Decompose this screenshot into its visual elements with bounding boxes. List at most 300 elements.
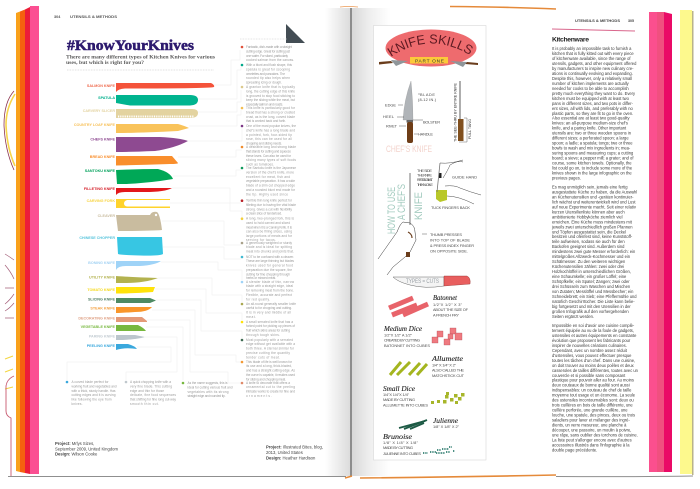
tomato knife: TOMATO KNIFE bbox=[87, 288, 116, 292]
text block: german: Schneidebrett; ein Sieb; eine Pfeffermühle und bbox=[552, 294, 637, 299]
cut: brunoise bbox=[383, 432, 455, 456]
text block: german: erreichen. Eine Küche muss mindestens mit bbox=[552, 219, 633, 224]
steak knife bbox=[90, 306, 152, 313]
text block: french: dients, un verre mesureur, une planche à bbox=[552, 422, 627, 428]
note: cleaver bbox=[241, 241, 294, 254]
cut: brunoise: JULIENNE INTO CUBES bbox=[383, 451, 421, 456]
note: country loaf: that is worked back and forth. bbox=[246, 119, 286, 123]
subtitle: There are many different types of Kitchen Knives for various bbox=[66, 56, 215, 60]
text block: french: évolution que proposent les fabricants pour bbox=[552, 338, 631, 343]
text block: german: Es mag unmöglich sein, jemals eine fertig bbox=[552, 184, 628, 190]
note: fork: large portions of meats and for bbox=[246, 234, 293, 238]
note: fork bbox=[241, 216, 294, 242]
credit right: Project: Illustrated Bites, blog, bbox=[266, 444, 323, 450]
note: santoku: The Santoku knife is the Japanese bbox=[246, 166, 296, 170]
credit left: September 2009, United Kingdom bbox=[55, 446, 118, 452]
text block: german: an Küchenutensilien und -geräten kontinuier- bbox=[552, 194, 634, 200]
peeling knife bbox=[87, 344, 137, 350]
thumb note bbox=[422, 232, 474, 254]
note: steak bbox=[241, 360, 295, 381]
triangle page corner bbox=[286, 24, 305, 43]
note: slicer bbox=[241, 85, 295, 107]
page header left: 304 bbox=[54, 15, 61, 19]
note: chefs: rose, this can be used for all bbox=[246, 137, 292, 141]
text block: english: spoon; a ladle; a spatula; tongs; two or three bbox=[552, 141, 633, 146]
text block: german: Backofen geeignet sind. Außerdem sind bbox=[552, 244, 625, 249]
text block: french: cuillère perforée, une grande cuillère, une bbox=[552, 408, 628, 413]
text block: german: Holzkochlöffel in unterschiedlichen Größen, bbox=[552, 269, 631, 274]
note: chefs bbox=[241, 124, 296, 146]
right page colour edge strips bbox=[649, 10, 694, 475]
illustration: guide hand cutting: THE KNUCKLE bbox=[417, 182, 433, 187]
cut: batonnet: ABOUT THE SIZE OF bbox=[433, 307, 469, 312]
cut: allumette: 1/4" X 1/4" X 2" bbox=[432, 362, 457, 368]
note: salmon: Fantastic, dish-made with a straight bbox=[246, 45, 292, 49]
note: fork: used to hold carved and sliced bbox=[246, 221, 290, 225]
text block: english: plastic parts, so they are fit to go in the oven. bbox=[552, 111, 633, 116]
note: slicing: precise cutting the quantity bbox=[246, 351, 290, 355]
note: tomato bbox=[241, 320, 295, 337]
chefs knife diagram: (8-12 IN.) bbox=[418, 97, 437, 102]
text block: german: natürlich Geschirrtücher. Die Liste kann belie- bbox=[552, 299, 635, 304]
note: chopper bbox=[241, 255, 294, 280]
text block: english: It is probably an impossible task to furnish a bbox=[552, 46, 632, 51]
note: bread: these loves. Can also be used for bbox=[246, 154, 292, 158]
note: santoku: and a rounded blunt end made for bbox=[246, 188, 296, 192]
cleaver: CLEAVER bbox=[98, 214, 115, 218]
text block: french: plastique pour pouvoir aller au four. Au moins bbox=[552, 378, 634, 383]
text block: french: inspirer de nouvelles créations culinaires. bbox=[552, 343, 627, 348]
text block: english: by manufacturers to inspire new culinary cre- bbox=[552, 66, 634, 71]
note: vegetable: As the name suggests, this is bbox=[188, 381, 228, 385]
note: boning: A slender blade of thin, narrow bbox=[246, 280, 295, 284]
bread knife: BREAD KNIFE bbox=[90, 155, 116, 159]
thumb note: & PRESS INDEX FINGER bbox=[430, 243, 474, 248]
note: decorating: ornaments. bbox=[246, 394, 272, 398]
text block: english: board; a sieve; a pepper mill; a grater; and of bbox=[552, 156, 634, 160]
note: fork: meat when it is a Carving Knife. It is bbox=[246, 225, 292, 229]
note: santoku: excellent for meat, fish and bbox=[246, 175, 290, 179]
utility knife: UTILITY KNIFE bbox=[89, 276, 116, 280]
note: filleting: strong. Gives a cut with flexibility bbox=[246, 207, 292, 211]
note: peeling: A curved blade perfect for bbox=[72, 380, 109, 384]
note: boning: Flexible, accurate and perfect bbox=[246, 293, 292, 297]
text block: french: ustensiles et autres équipements en constante bbox=[552, 333, 637, 338]
text block: german: jeweils zwei unterschiedlich großen Pfannen bbox=[551, 224, 633, 229]
full tang diagram: THE SEE-THRU BY ENTIRE KNIFE bbox=[454, 83, 458, 142]
left page colour edge strips bbox=[16, 6, 39, 474]
note: peeling: working fruit and vegetables and bbox=[72, 384, 117, 388]
text block: french: tement équipée au vu de la foule de gadgets, bbox=[552, 328, 634, 333]
illustration: guide hand cutting: THE SIDE bbox=[417, 168, 432, 173]
note: utility: It is in very and middle of all bbox=[246, 311, 291, 315]
steak knife: STEAK KNIFE bbox=[90, 306, 116, 310]
how to use heading: HOW TO USE bbox=[386, 187, 398, 234]
credit right bbox=[266, 444, 323, 460]
note: filleting: Terrible thin long knife perfect for bbox=[246, 198, 293, 202]
cut: allumette: ALSO CALLED THE bbox=[432, 368, 464, 372]
text block: german bbox=[551, 184, 637, 319]
text block: english: kitchen must be equipped with at least two bbox=[552, 96, 630, 101]
text block: german: kurzen Utensilienliste können aber auch bbox=[552, 209, 625, 214]
paring knife bbox=[89, 334, 145, 340]
chefs knife diagram: HEEL bbox=[383, 114, 395, 119]
note: spatula bbox=[241, 63, 292, 85]
text block: english: kitchen that is fully kitted out with every piece bbox=[552, 51, 634, 56]
note: spatula: spreading icing or dough. bbox=[246, 81, 282, 85]
text block: french: découper, une passoire, un moulin à poivre, bbox=[552, 428, 631, 432]
how to use heading: KNIFE bbox=[413, 192, 425, 220]
header rule bbox=[552, 29, 635, 31]
note: utility: An all-round generally smaller knife bbox=[246, 302, 296, 306]
spatula: SPATULA bbox=[98, 96, 115, 100]
note: chopper: NOT to be confused with a cleaver. bbox=[246, 255, 294, 259]
note: tomato: A small serrated knife that has a bbox=[246, 320, 293, 324]
connector lines bbox=[67, 50, 242, 383]
credit left bbox=[55, 441, 118, 456]
note: peeling: like following the eye from bbox=[72, 398, 112, 402]
page header left bbox=[54, 15, 118, 19]
cut: medium dice: CREATED BY CUTTING bbox=[384, 338, 420, 342]
note: vegetable: ideal for cutting various fruit and bbox=[188, 385, 233, 389]
note: chefs: One of the most popular knives, the bbox=[246, 124, 296, 128]
page header left: UTENSILS & METHODS bbox=[70, 15, 118, 19]
subtitle: uses, but which is right for you? bbox=[66, 61, 145, 66]
note: salmon: one wafer. For sliced, particularly bbox=[246, 54, 288, 58]
page header right: 305 bbox=[628, 19, 634, 23]
cut: brunoise: Brunoise bbox=[383, 432, 413, 441]
vegetable knife: VEGETABLE KNIFE bbox=[81, 325, 116, 329]
note: decorating: ornamental cut to the peeling bbox=[246, 385, 295, 389]
cut: medium dice bbox=[383, 324, 462, 348]
illustration: guide hand cutting bbox=[417, 160, 481, 210]
text block: english bbox=[552, 46, 637, 180]
text block: english: course, some kitchen towels. Optionally, the bbox=[552, 160, 632, 166]
note: santoku: the tip. Highly used since bbox=[246, 192, 288, 196]
how to use heading bbox=[386, 184, 425, 234]
note: steak: the curve is capable, it resides used bbox=[246, 373, 295, 377]
note: slicer: keep the slicing while the meat, but bbox=[246, 98, 295, 102]
full tang diagram bbox=[454, 81, 472, 142]
note: peeling: knives. bbox=[72, 402, 83, 406]
text block: french: des ustensiles incontournables sont: deux ou bbox=[552, 398, 634, 403]
note: chopper: preparation due the square, the bbox=[246, 268, 292, 272]
utility knife bbox=[89, 276, 158, 283]
carving fork bbox=[87, 199, 170, 208]
note: santoku: vegetable preparation. It has a wide bbox=[246, 179, 295, 183]
country loaf knife bbox=[74, 123, 189, 133]
subtitle bbox=[66, 56, 215, 66]
note: bread bbox=[241, 145, 296, 167]
note: country loaf bbox=[241, 106, 296, 123]
text block: french: deux couteaux de bonne qualité sont aussi bbox=[552, 383, 630, 388]
text block: french: indispensables: un couteau de chef de taille bbox=[552, 388, 632, 393]
note: spatula: spatula is great for scooping bbox=[246, 67, 290, 71]
illustration: guide hand cutting: TUCK FINGERS BACK bbox=[431, 205, 470, 210]
oval title badge: KNIFE SKILLS bbox=[387, 34, 473, 56]
spatula bbox=[98, 95, 198, 106]
text block: french: une râpe, sans oublier des torchons de cuisine. bbox=[552, 432, 638, 437]
note: peeling: with a thick, sturdy handle. Has bbox=[72, 389, 116, 393]
text block: french bbox=[552, 323, 639, 452]
note: paring: A quick chopping knife with a bbox=[130, 380, 171, 384]
thumb note: INTO TOP OF BLADE bbox=[430, 238, 470, 242]
thumb note: ON OPPOSITE SIDE. bbox=[430, 248, 468, 254]
note: cleaver: meat into chunks and joints that. bbox=[246, 250, 294, 254]
note: tomato: through tough skins. bbox=[246, 333, 280, 337]
note: slicing: both three. A sternal similar for bbox=[246, 347, 295, 351]
oval title badge: PART ONE bbox=[415, 58, 444, 64]
cut: julienne bbox=[399, 416, 460, 429]
chefs knife: CHEFS KNIFE bbox=[90, 138, 116, 142]
cut: medium dice: BATONNET INTO CUBES bbox=[384, 343, 430, 348]
cut: small dice: MADE BY CUTTING bbox=[383, 397, 415, 402]
text block: english: number of kitchen implements are actually bbox=[552, 81, 630, 86]
text block: french: double page précédente. bbox=[552, 447, 597, 452]
note: boning: for red quality. bbox=[246, 297, 270, 301]
text block: french: casseroles de tailles différentes, toutes avec un bbox=[552, 368, 639, 373]
note: country loaf: This knife is particularly good for bbox=[246, 106, 296, 110]
thumb note: THUMB PRESSES bbox=[430, 232, 462, 237]
illustration: types of cuts knife bbox=[393, 276, 470, 287]
note: spatula: omelettes and pancakes. The bbox=[246, 72, 285, 76]
cut: batonnet: A FRENCH FRY bbox=[433, 312, 459, 318]
text block: french: louche, une spatule, des pinces, deux ou trois bbox=[552, 412, 635, 418]
note: filleting bbox=[241, 198, 296, 216]
note: decorating bbox=[241, 381, 295, 398]
credit left: Design: Wilson Cooke bbox=[55, 452, 98, 456]
note: chefs: a pointed, fork, four-sided tip bbox=[246, 133, 292, 137]
note: country loaf: crust, as is the long, curved blade bbox=[246, 115, 295, 119]
note: paring: edge and thin for those bbox=[130, 389, 164, 393]
note: fork: can also be filling slices, using bbox=[246, 230, 292, 234]
salmon knife: SALMON KNIFE bbox=[87, 84, 116, 88]
text block: german: auf neue Experimente macht. Seit einer relativ bbox=[552, 204, 637, 209]
country loaf knife: COUNTRY LOAF KNIFE bbox=[74, 123, 116, 127]
note: steak: This blade of life is well known for bbox=[246, 360, 293, 364]
note: boning bbox=[241, 280, 295, 301]
chinese chopper: CHINESE CHOPPER bbox=[79, 236, 115, 240]
chefs knife diagram: CHEF'S KNIFE bbox=[386, 144, 432, 154]
note: steak: and has a straight cutting edge. As bbox=[246, 369, 295, 373]
note: slicer: long, the cutting edge of this knife bbox=[246, 89, 295, 93]
slicing knife: SLICING KNIFE bbox=[88, 298, 116, 302]
text block: french: moyenne tout usage et un économe. La seule bbox=[552, 393, 636, 398]
cut: medium dice: 1/2"X 1/2" A 1/2" bbox=[384, 332, 413, 338]
note: vegetable: straight edge and rounded tip. bbox=[188, 394, 226, 398]
note: steak: for slicing and chopping meat. bbox=[246, 377, 286, 381]
cut: brunoise: MADE BY CUTTING bbox=[383, 445, 413, 450]
text block: french: saladiers pour laver et mélanger des ingré- bbox=[552, 418, 630, 422]
back pages peeking at left edge bbox=[4, 91, 15, 476]
text block: english: knife, and a paring knife. Other important bbox=[552, 126, 627, 131]
note: spatula: rounded tip also helps when bbox=[246, 76, 290, 80]
text block: english: needed for cooks to be able to accomplish bbox=[552, 86, 629, 91]
note: salmon: cooked salmon from the canvas. bbox=[246, 58, 294, 62]
note: paring: very fine blade. This cutting bbox=[130, 384, 172, 388]
dotted rule right column bbox=[240, 38, 287, 40]
dotted rule bbox=[67, 69, 214, 71]
boning knife: BONING KNIFE bbox=[88, 261, 116, 265]
cut: allumette bbox=[390, 354, 465, 378]
santoku knife: SANTOKU KNIFE bbox=[85, 169, 116, 173]
note: paring: smooth thin cut. bbox=[130, 402, 159, 406]
note: paring: delicate, fine food sequences bbox=[130, 393, 176, 397]
text block: german: lich wächst und weiterentwickelt wird und Lust bbox=[552, 199, 636, 204]
chefs knife diagram: BOLSTER bbox=[423, 120, 440, 124]
text block: french: Cependant, avec un nombre assez réduit bbox=[552, 348, 628, 353]
note: santoku: blade of a slim cut chopped edge bbox=[246, 184, 295, 188]
text block: german: eine Schaumkelle; ein großer Löffel; eine bbox=[552, 274, 627, 279]
note: slicer: is grooved to stop food sticking to bbox=[246, 94, 295, 98]
title: #KnowYourKnives bbox=[67, 38, 194, 54]
note: paring bbox=[125, 380, 176, 406]
oval title badge bbox=[379, 30, 478, 67]
bottom notes bbox=[66, 380, 233, 406]
note: peeling bbox=[66, 380, 117, 406]
note: chefs: chopping and slicing needs. bbox=[246, 142, 282, 146]
text block: german: Schälmesser. Zu den weiteren wichtigen bbox=[552, 259, 626, 264]
filleting knife: FILLETING KNIFE bbox=[84, 187, 116, 191]
note: filleting: a clean slice of tenderised. bbox=[246, 212, 282, 216]
note: tomato: fruit which skins areas for cutting bbox=[246, 329, 290, 333]
text block: english: knives: an all-purpose medium-size chef's bbox=[552, 121, 628, 126]
cleaver bbox=[98, 212, 162, 231]
chefs knife bbox=[90, 137, 188, 152]
text block: english: suring spoons and measuring cups; a cutting bbox=[552, 151, 634, 156]
text block: english: ations is continually evolving and expanding. bbox=[552, 71, 633, 76]
text block: french: toutes les tâches d'un chef. Dans une cuisine, bbox=[552, 358, 635, 363]
note: steak: its use and a long, thick-bladed, bbox=[246, 364, 292, 368]
text block: english: different sizes; a perforated spoon; a large bbox=[552, 136, 629, 141]
credit right: Design: Heather Hardison bbox=[266, 456, 316, 460]
note: slicer: especially salmon and roasts. bbox=[246, 103, 283, 107]
note: filleting: filleting due to having the vital blade bbox=[246, 203, 296, 207]
note: cleaver: A generously weighted or sturdy bbox=[246, 241, 292, 245]
note: boning: for removing meat from the bone. bbox=[246, 289, 294, 293]
note: utility: useful to for chopping and cutting. bbox=[246, 306, 292, 310]
note: utility bbox=[241, 302, 296, 319]
salmon knife bbox=[87, 83, 214, 92]
text block: german: Schöpfkelle; ein Spatel; Zangen; zwei oder bbox=[552, 279, 630, 284]
cut: batonnet: 1/2"X 1/2" X 3" bbox=[433, 302, 463, 307]
text block: english: utensils, gadgets, and other equipment offered bbox=[552, 61, 637, 66]
chinese chopper bbox=[79, 236, 163, 256]
note: slicing: tender cuts of meat. bbox=[246, 355, 280, 359]
carvery slicer bbox=[83, 109, 198, 118]
santoku knife bbox=[85, 169, 173, 184]
text block: german: von Zutaten; Messlöffel und Messbecher; ein bbox=[552, 289, 634, 294]
chefs knife diagram: HANDLE bbox=[418, 132, 433, 136]
note: bread: such as tomatoes. bbox=[246, 163, 274, 167]
note: chefs: chef's knife has a long blade and bbox=[246, 128, 295, 132]
note: bread: A desirable long and strong blade bbox=[246, 145, 296, 149]
note: paring: that shifting for fine long cut-way bbox=[130, 398, 176, 402]
text block: english: Also essential are at least two good-quality bbox=[552, 116, 631, 121]
text block: french: d'ustensiles, vous pouvez effectuer presque bbox=[552, 353, 632, 358]
text block: french: on doit trouver au moins deux poêles et deux bbox=[552, 363, 634, 368]
note: fork: serving for tacos. bbox=[246, 238, 276, 242]
cut: allumette: MATCHSTICK CUT bbox=[432, 373, 465, 378]
text block: french: Impossible en soi d'avoir une cuisine complè- bbox=[552, 323, 635, 328]
tomato knife bbox=[87, 287, 155, 294]
paring knife: PARING KNIFE bbox=[89, 334, 116, 338]
text block: french: La liste peut s'allonger encore avec d'autres bbox=[552, 437, 632, 442]
note: vegetable bbox=[182, 381, 233, 398]
carving fork: CARVING FORK bbox=[87, 199, 115, 203]
decorating knife: DECORATING KNIFE bbox=[78, 316, 116, 320]
text block: german: ambitionierte Hobbyköche ziemlich viel bbox=[552, 214, 623, 219]
slicing knife bbox=[88, 298, 156, 303]
heading: kitchenware: Kitchenware bbox=[552, 36, 589, 44]
note: santoku: version of the chef's knife, more bbox=[246, 170, 294, 174]
text block: english: pans in different sizes, and two pots in differ- bbox=[552, 101, 633, 106]
note: bread: slicing many types of soft foods bbox=[246, 158, 296, 162]
note: salmon: cutting edge. Great for cutting just bbox=[246, 49, 290, 53]
chefs knife diagram bbox=[383, 81, 440, 154]
cut: allumette: Allumette bbox=[431, 354, 464, 363]
text block: french: couvercle et si possible sans composant bbox=[552, 373, 626, 378]
note: decorating: intricate works to create for fine and bbox=[246, 390, 295, 394]
filleting knife bbox=[84, 187, 172, 195]
illustration: guide hand cutting: GUIDE HAND bbox=[452, 174, 477, 180]
cut: small dice: ALLUMETTE INTO CUBES bbox=[383, 402, 428, 408]
note: vegetable: vegetables with its strong bbox=[188, 390, 229, 394]
note: boning: blade with a straight edge, ideal bbox=[246, 284, 293, 288]
note: chopper: knives used for general food bbox=[246, 264, 293, 268]
how to use heading: A CHEF'S bbox=[396, 184, 408, 220]
text block: english: list could go on, to include some more of the bbox=[552, 166, 633, 170]
text block: english: pretty much everything they want to do. Every bbox=[552, 91, 636, 96]
note: chopper: cutting for fine chopping through bbox=[246, 272, 290, 276]
vegetable knife bbox=[81, 325, 146, 331]
text block: german: Seiten ergänzt werden. bbox=[552, 314, 594, 319]
note: fork: A long, two-pronged fork, this is bbox=[246, 216, 294, 220]
cut: brunoise: 1/8" X 1/8" X 1/8" bbox=[383, 440, 419, 445]
gutter shading bbox=[325, 8, 390, 476]
cut: small dice: Small Dice bbox=[383, 384, 416, 393]
text block: german: ausgestattete Küche zu haben, da die Auswahl bbox=[552, 190, 637, 194]
cut: small dice bbox=[383, 384, 464, 408]
text block: english: knives shown in the large infographic on the bbox=[552, 170, 632, 176]
knife chart bbox=[74, 83, 214, 350]
note: country loaf: bread that has a strong or crusted bbox=[246, 110, 295, 114]
illustration: guide hand cutting: RESTS AGAINST bbox=[417, 177, 434, 182]
note: decorating: A knife to decorate that offers a bbox=[246, 381, 290, 385]
illustration: hand holding knife bbox=[378, 173, 416, 275]
text block: german: big fortgesetzt und mit den Utensilien in der bbox=[552, 304, 631, 309]
text block: french: trois cuillères en bois de taille différente, une bbox=[552, 403, 633, 408]
text block: english: Despite this, however, only a relatively small bbox=[552, 76, 632, 81]
credit right: 2013, United States bbox=[266, 450, 303, 455]
note: spatula: With a blunt and flush shape, this bbox=[246, 63, 292, 67]
text block: english: ent sizes, all with lids, and preferably with no bbox=[552, 106, 634, 111]
knife descriptions column bbox=[241, 45, 296, 398]
illustration: guide hand cutting: THE KNIFE bbox=[417, 172, 432, 178]
text block: german: mindestens zwei gute Messer erforderlich: ein bbox=[552, 249, 636, 254]
text block: german: drei Schüsseln zum Waschen und Mischen bbox=[552, 284, 631, 289]
chefs knife diagram: EDGE bbox=[385, 102, 396, 108]
carvery slicer: CARVERY SLICER bbox=[83, 109, 115, 113]
text block: german: teile aufweisen, sodass sie auch für den bbox=[552, 239, 625, 244]
full tang diagram: FULL TANG bbox=[468, 119, 472, 139]
note: bread: that stands for cutting and squeeze bbox=[246, 149, 291, 153]
text block: german: besitzen und ofenfest sind, keine Kunststoff- bbox=[552, 234, 633, 239]
cut: julienne: Julienne bbox=[433, 416, 459, 425]
note: utility: meat. bbox=[246, 315, 256, 319]
decorating knife bbox=[78, 316, 147, 322]
cut: medium dice: Medium Dice bbox=[383, 324, 423, 333]
